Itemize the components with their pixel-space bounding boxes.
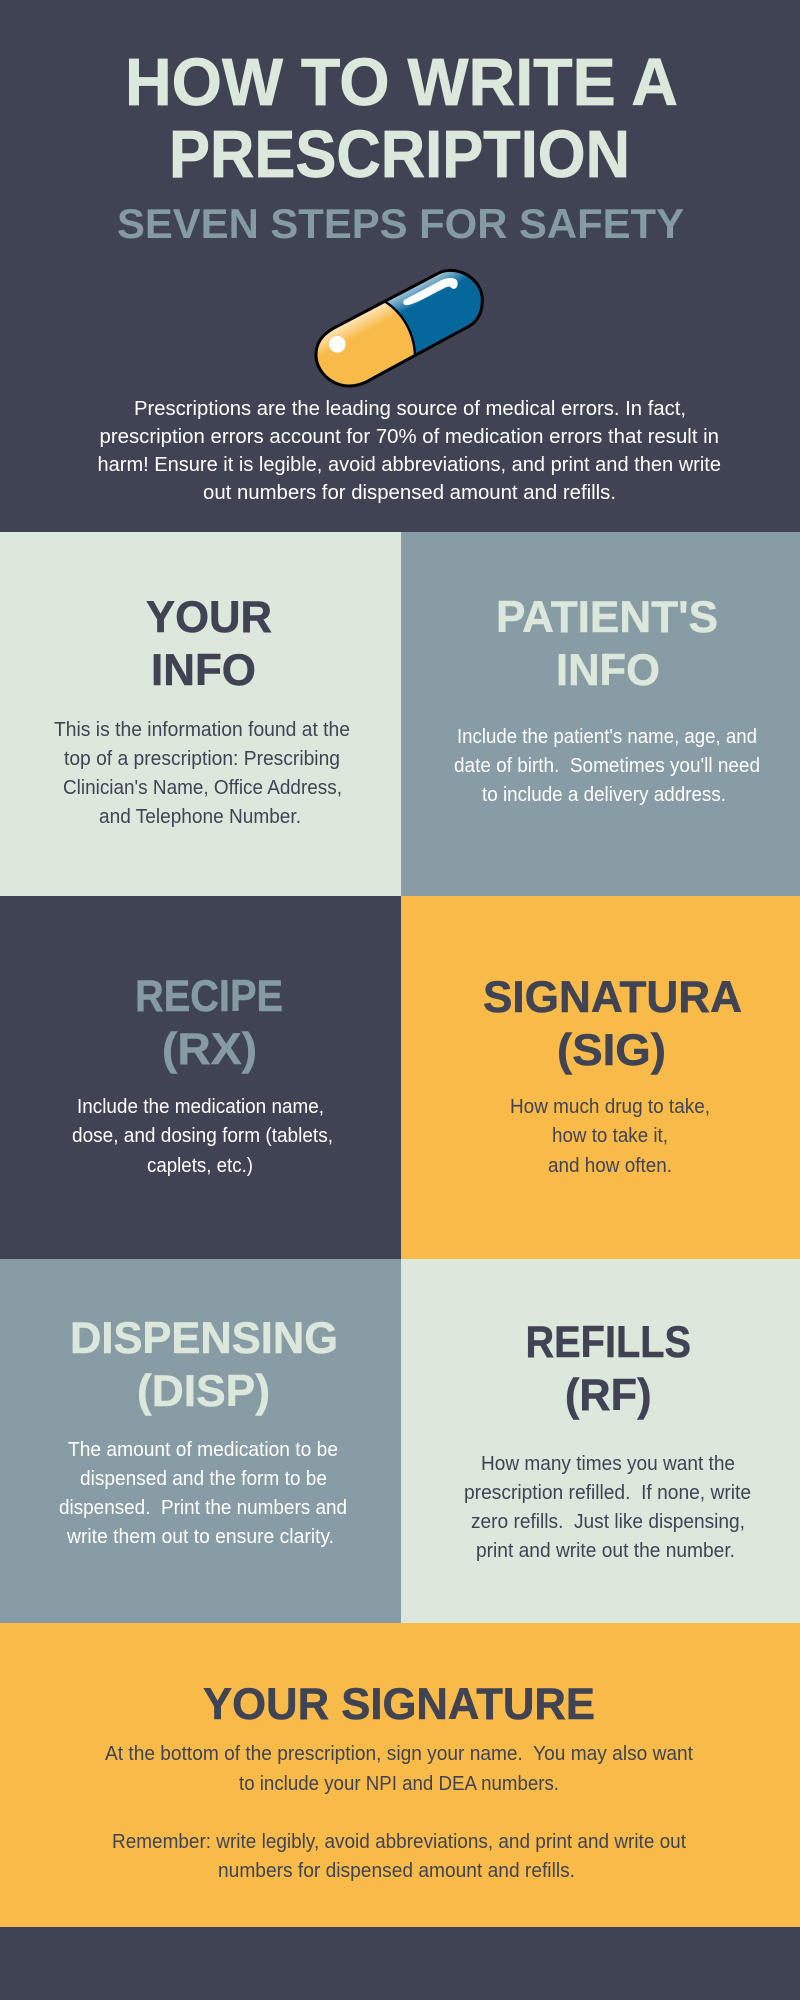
text: refills: How many times you want the (481, 1453, 735, 1475)
text: signature instructions: At the bottom of the prescription, sign your name. You may also want (105, 1743, 693, 1765)
text: reminder: numbers for dispensed amount and refills. (218, 1860, 575, 1882)
text: patient's info (454, 726, 760, 806)
heading: dispensing: (DISP) (137, 1367, 270, 1416)
heading: your info (146, 593, 272, 695)
panel: dispensing (0, 1259, 401, 1623)
text: dispensing (59, 1439, 347, 1548)
heading: patient's info (496, 593, 718, 695)
title: HOW TO WRITE A (125, 45, 678, 120)
heading: refills: REFILLS (526, 1318, 691, 1367)
heading: signatura: SIGNATURA (483, 973, 742, 1022)
text: signatura: How much drug to take, (510, 1096, 710, 1118)
text: your info: and Telephone Number. (99, 806, 301, 828)
panel: your signature (0, 1623, 800, 1927)
text: refills: print and write out the number. (476, 1540, 735, 1562)
panel: refills (401, 1259, 800, 1623)
heading: refills (526, 1318, 691, 1420)
footer band (0, 1927, 800, 2000)
text: dispensing: The amount of medication to be (68, 1439, 338, 1461)
text: reminder (112, 1831, 686, 1882)
icon: capsule pill (314, 268, 484, 388)
text: dispensing: write them out to ensure clarity. (66, 1526, 334, 1548)
heading: your info: YOUR (146, 593, 272, 642)
text: dispensing: dispensed. Print the numbers and (59, 1497, 347, 1519)
text: signature instructions: to include your NPI and DEA numbers. (239, 1773, 559, 1795)
heading: patient's info: PATIENT'S (496, 593, 718, 642)
panel: your info (0, 532, 401, 896)
title (125, 45, 678, 192)
heading: your info: INFO (151, 646, 256, 695)
title: PRESCRIPTION (169, 117, 630, 192)
text: patient's info: to include a delivery address. (482, 784, 726, 806)
intro text: prescription errors account for 70% of medication errors that result in (100, 426, 719, 448)
text: your info: This is the information found at the (54, 719, 350, 741)
panel: signatura (401, 896, 800, 1259)
heading: recipe: (RX) (162, 1025, 257, 1074)
heading: dispensing (70, 1314, 338, 1416)
text: refills: zero refills. Just like dispensing, (471, 1511, 745, 1533)
intro text: out numbers for dispensed amount and refills. (203, 482, 616, 504)
text: your info: Clinician's Name, Office Address, (63, 777, 342, 799)
heading: recipe (135, 972, 283, 1074)
text: signatura: how to take it, (552, 1125, 668, 1147)
text: your info: top of a prescription: Prescribing (64, 748, 340, 770)
heading: patient's info: INFO (556, 646, 660, 695)
intro text: harm! Ensure it is legible, avoid abbreviations, and print and then write (98, 454, 721, 476)
heading: signatura: (SIG) (557, 1026, 666, 1075)
text: signatura: and how often. (548, 1155, 672, 1177)
heading: your signature: YOUR SIGNATURE (203, 1680, 595, 1729)
intro text (98, 398, 721, 504)
text: your info (54, 719, 350, 828)
text: signature instructions (105, 1743, 693, 1795)
text: dispensing: dispensed and the form to be (80, 1468, 327, 1490)
text: refills (464, 1453, 751, 1562)
heading: signatura (483, 973, 742, 1075)
intro text: Prescriptions are the leading source of medical errors. In fact, (134, 398, 686, 420)
subtitle: SEVEN STEPS FOR SAFETY (117, 200, 684, 247)
text: patient's info: Include the patient's name, age, and (457, 726, 757, 748)
text: recipe: dose, and dosing form (tablets, (72, 1125, 333, 1147)
text: recipe: caplets, etc.) (147, 1155, 253, 1177)
heading: dispensing: DISPENSING (70, 1314, 338, 1363)
text: patient's info: date of birth. Sometimes you'll need (454, 755, 760, 777)
text: recipe: Include the medication name, (77, 1096, 324, 1118)
panel: header (98, 58, 720, 503)
text: signatura (510, 1096, 710, 1177)
panel: patient's info (401, 532, 800, 896)
text: refills: prescription refilled. If none, write (464, 1482, 751, 1504)
panel: recipe (0, 896, 401, 1259)
text: reminder: Remember: write legibly, avoid abbreviations, and print and write out (112, 1831, 686, 1853)
heading: refills: (RF) (565, 1371, 652, 1420)
text: recipe (72, 1096, 333, 1177)
heading: recipe: RECIPE (135, 972, 283, 1021)
